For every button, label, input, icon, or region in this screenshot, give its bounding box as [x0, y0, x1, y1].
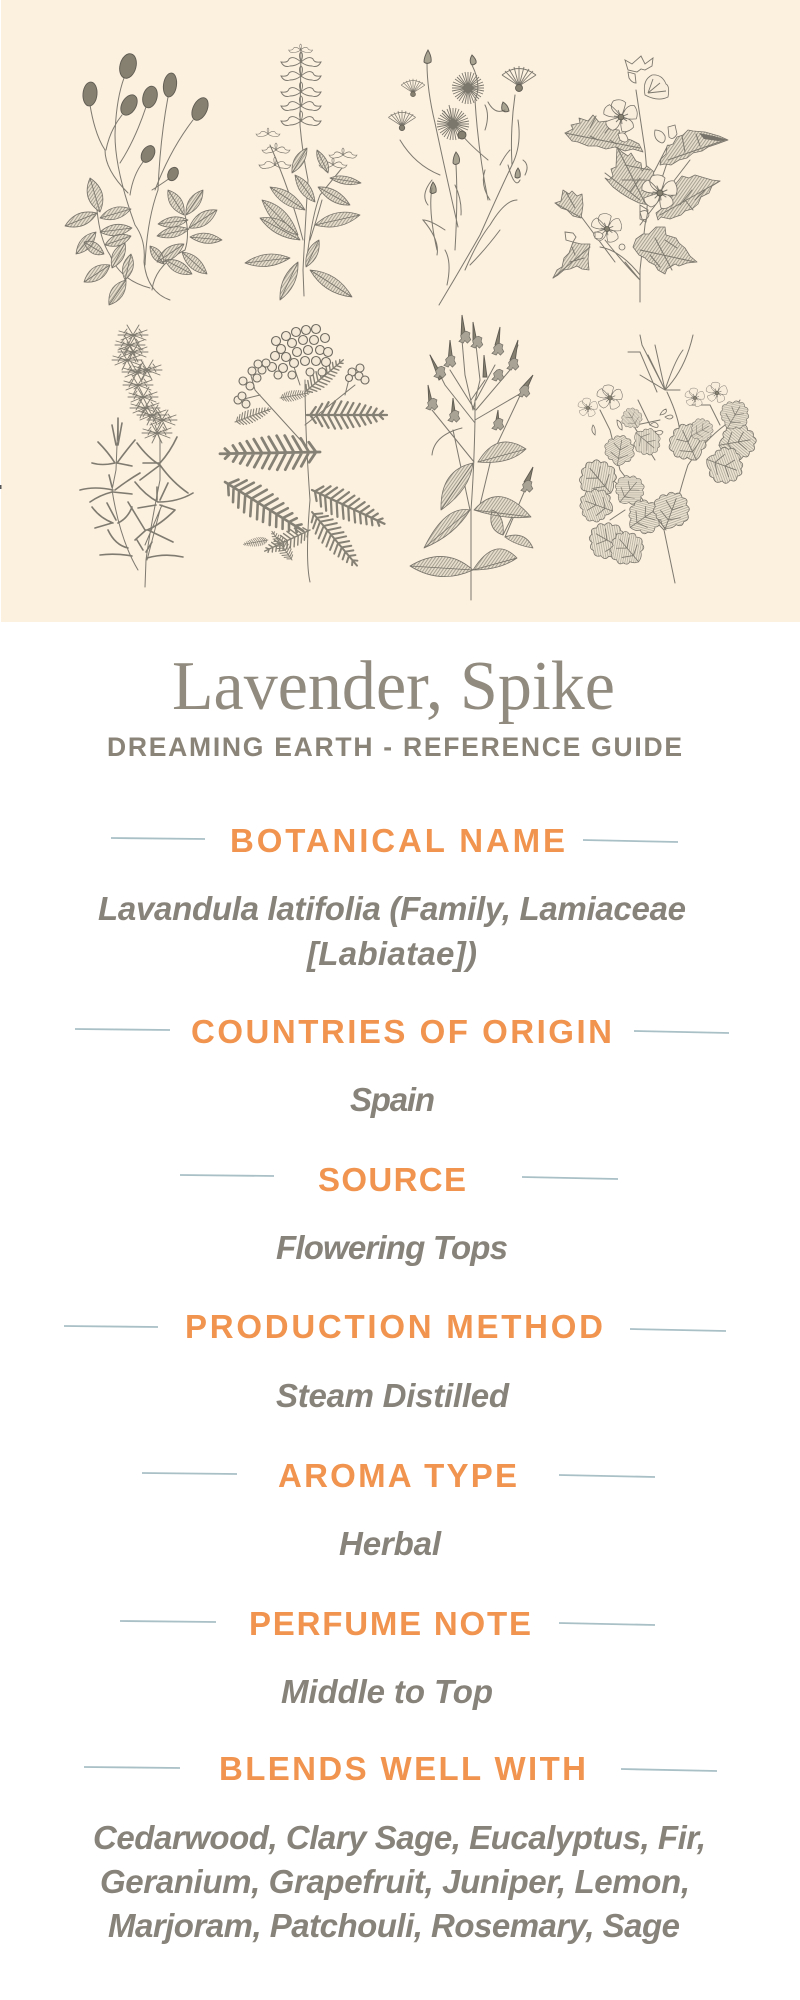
text: blends value: Cedarwood, Clary Sage, Eucalyptus, Fir, — [93, 1819, 706, 1856]
section: blends well with — [84, 1750, 717, 1944]
panel: botanical illustrations header — [0, 0, 800, 622]
illustration: needle-leaved herb with fuzzy spike — [80, 325, 193, 587]
section: botanical name — [98, 822, 686, 972]
subtitle: DREAMING EARTH - REFERENCE GUIDE — [107, 732, 682, 762]
illustration: celandine plant with lobed leaves — [571, 335, 759, 583]
text: botanical name value: [Labiatae]) — [306, 935, 477, 972]
section: aroma type — [142, 1457, 655, 1562]
illustration: mallow plant with jagged leaves — [553, 56, 728, 302]
illustration: sage plant with flower spikes — [245, 44, 361, 300]
heading: botanical name: BOTANICAL NAME — [230, 822, 565, 859]
text: blends value: Marjoram, Patchouli, Rosemary, Sage — [108, 1907, 680, 1944]
section: source — [180, 1161, 618, 1266]
heading: source: SOURCE — [318, 1161, 466, 1198]
text: perfume value: Middle to Top — [281, 1673, 493, 1710]
text: blends value — [93, 1819, 706, 1944]
text: origin value: Spain — [350, 1081, 435, 1118]
text: production value: Steam Distilled — [276, 1377, 510, 1414]
section: countries of origin — [75, 1013, 729, 1118]
illustration: cornflower plant — [388, 50, 536, 305]
heading: production method: PRODUCTION METHOD — [185, 1308, 603, 1345]
illustration: tansy plant with fern-like leaves — [217, 324, 390, 582]
heading: aroma type: AROMA TYPE — [278, 1457, 517, 1494]
illustration: burnet plant with oval flower heads — [65, 52, 222, 305]
heading: countries of origin: COUNTRIES OF ORIGIN — [191, 1013, 612, 1050]
section: production method — [64, 1308, 726, 1414]
text: botanical name value — [98, 890, 686, 972]
section: perfume note — [120, 1605, 655, 1710]
text: blends value: Geranium, Grapefruit, Juniper, Lemon, — [100, 1863, 690, 1900]
text: source value: Flowering Tops — [276, 1229, 508, 1266]
text: botanical name value: Lavandula latifolia (Family, Lamiaceae — [98, 890, 686, 927]
illustration: vervain plant with pointed spikes — [410, 315, 533, 600]
heading: blends well with: BLENDS WELL WITH — [219, 1750, 586, 1787]
decorative edge mark — [0, 485, 2, 489]
text: aroma value: Herbal — [339, 1525, 442, 1562]
title: Lavender, Spike — [172, 648, 615, 725]
heading: perfume note: PERFUME NOTE — [249, 1605, 531, 1642]
